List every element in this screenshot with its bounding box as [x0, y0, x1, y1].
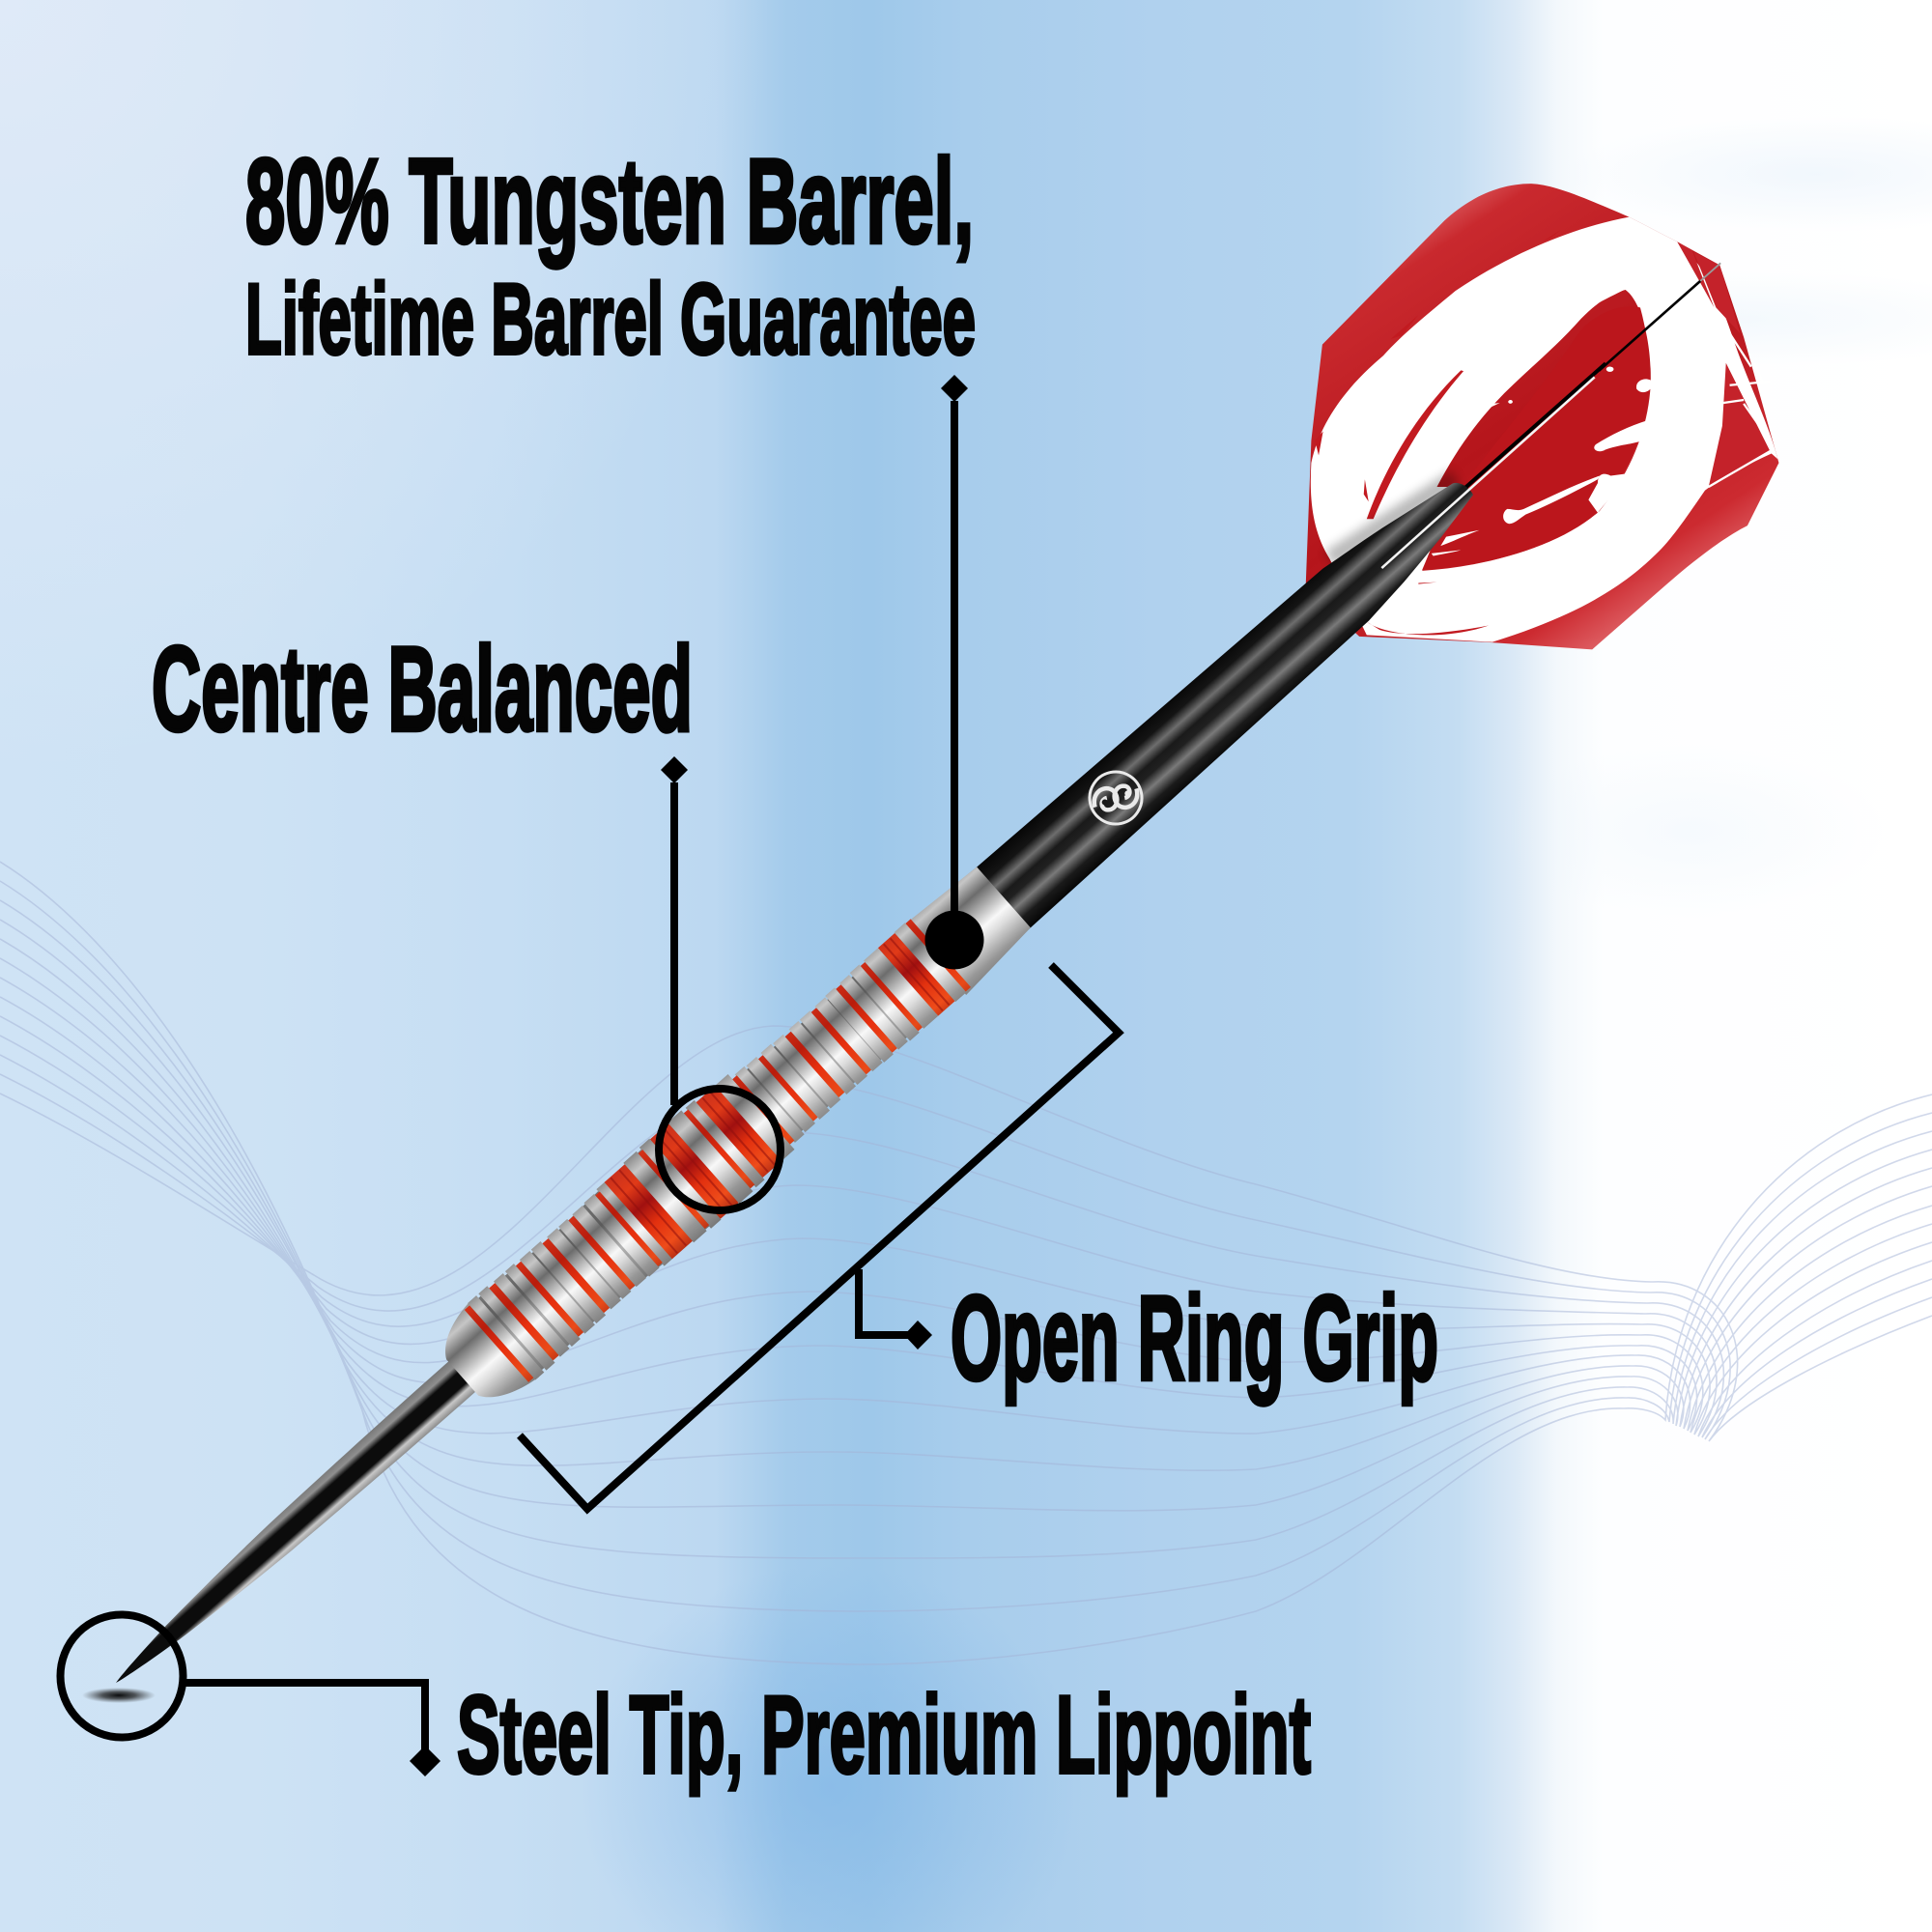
barrel smooth collar	[904, 864, 1036, 995]
dart	[80, 222, 1756, 1723]
barrel	[426, 857, 1039, 1417]
flight	[1306, 184, 1778, 649]
barrel core	[465, 859, 1038, 1382]
stem soft shadow on flight	[1330, 477, 1456, 559]
barrel ridges	[466, 917, 972, 1382]
callout: tungsten barrel leader and dot	[925, 375, 983, 970]
barrel band dark lines	[610, 932, 954, 1255]
flight red brush strokes	[1315, 230, 1561, 635]
barrel wide red bands	[603, 927, 960, 1261]
flight right red wedges	[1677, 242, 1771, 487]
flight inner white splash	[1432, 288, 1653, 556]
logo on stem	[1085, 767, 1147, 829]
flight white brush ring	[1311, 217, 1777, 642]
shaft wire	[1461, 263, 1720, 493]
flight right white scratches	[1709, 315, 1771, 487]
tip shadow	[82, 1688, 156, 1703]
label: steel tip premium lippoint: Steel Tip, Premium Lippoint	[457, 1674, 1311, 1797]
flight dark centre shading	[1422, 306, 1649, 570]
decorative wave line bundle	[0, 862, 1932, 1664]
callout: centre balanced leader and circle	[659, 756, 781, 1210]
stem white seam	[1380, 377, 1596, 568]
label: open ring grip: Open Ring Grip	[951, 1272, 1438, 1406]
black stem	[976, 457, 1494, 929]
callout: steel tip circle and leader	[60, 1615, 440, 1776]
heading: lifetime barrel guarantee: Lifetime Barrel Guarantee	[245, 264, 976, 376]
barrel thin red grooves	[463, 916, 974, 1383]
heading: 80% tungsten barrel: 80% Tungsten Barrel,	[245, 135, 974, 269]
barrel nose	[428, 1300, 539, 1415]
flight red base	[1306, 184, 1778, 649]
steel point	[102, 1360, 476, 1698]
callout: grip bracket and leader	[520, 965, 1119, 1509]
label: centre balanced: Centre Balanced	[152, 623, 693, 756]
